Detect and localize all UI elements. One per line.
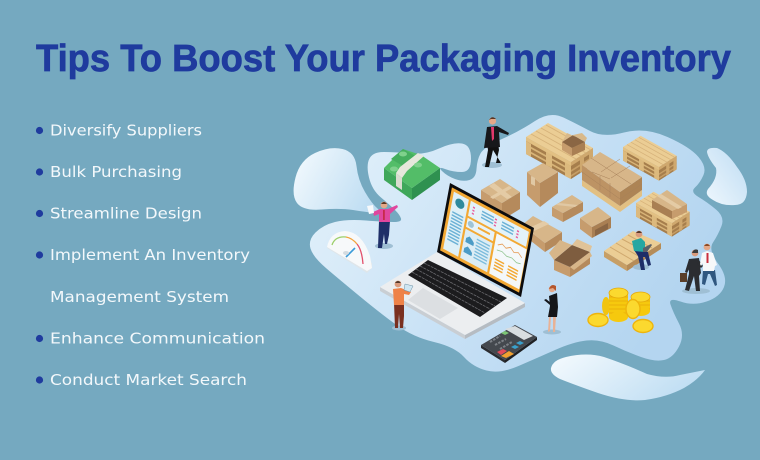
tip: implement an inventory management system: [36, 246, 250, 306]
coin stack large: [602, 288, 628, 322]
small open box on pallet: [562, 133, 587, 156]
person: seated man with laptop: [632, 231, 652, 270]
man with briefcase: [680, 249, 703, 291]
wide box by laptop: [522, 216, 562, 252]
stack of money: [384, 149, 440, 200]
box on pallet: [652, 190, 687, 219]
pallet of stacked boxes: [582, 152, 642, 212]
tip: conduct market search: Conduct Market Search: [50, 371, 247, 389]
right blob: [707, 148, 747, 205]
pallet stack with open box: [526, 123, 593, 179]
person: man in orange with tablet: [392, 281, 413, 330]
pallet stack with closed box: [636, 190, 690, 237]
tip: enhance communication: Enhance Communication: [50, 330, 265, 348]
large box behind laptop: [481, 179, 520, 220]
left blob: [294, 148, 380, 213]
coin stack small: [631, 292, 650, 316]
flat coin right: [633, 320, 653, 332]
speedometer gauge: [327, 231, 372, 273]
tip: streamline design: Streamline Design: [50, 204, 202, 222]
gold coins: [588, 288, 653, 332]
illustration: warehouse inventory scene: [294, 115, 747, 400]
calculator: [481, 325, 537, 363]
tip: diversify suppliers: Diversify Suppliers: [50, 122, 202, 140]
trackpad: [408, 288, 458, 319]
man in white shirt: [700, 244, 717, 286]
upright coin: [626, 300, 640, 318]
bottom blob: [551, 354, 705, 400]
flat coin left: [588, 314, 608, 326]
keyboard: [408, 260, 507, 317]
laptop screen: [437, 183, 534, 297]
person: man in pink shirt: [367, 202, 398, 249]
bullet list of tips: [36, 122, 265, 389]
low wooden pallet: [604, 231, 661, 271]
person: woman in black suit: [543, 285, 561, 334]
people: two men shaking hands: [680, 244, 717, 294]
pallet stack right: [623, 136, 677, 181]
laptop base: [380, 252, 525, 339]
laptop: [380, 183, 534, 339]
tip: implement an inventory management system: Management System: [50, 288, 229, 306]
square box: [580, 207, 611, 238]
tip: implement an inventory management system: Implement An Inventory: [50, 246, 250, 264]
tall cardboard box: [527, 163, 558, 207]
small flat box: [552, 195, 583, 222]
title: Tips To Boost Your Packaging Inventory: [36, 38, 731, 80]
main background blob: [310, 115, 725, 372]
tip: bulk purchasing: Bulk Purchasing: [50, 163, 182, 181]
open cardboard box: [549, 239, 592, 277]
person: manager in black suit: [482, 117, 509, 168]
